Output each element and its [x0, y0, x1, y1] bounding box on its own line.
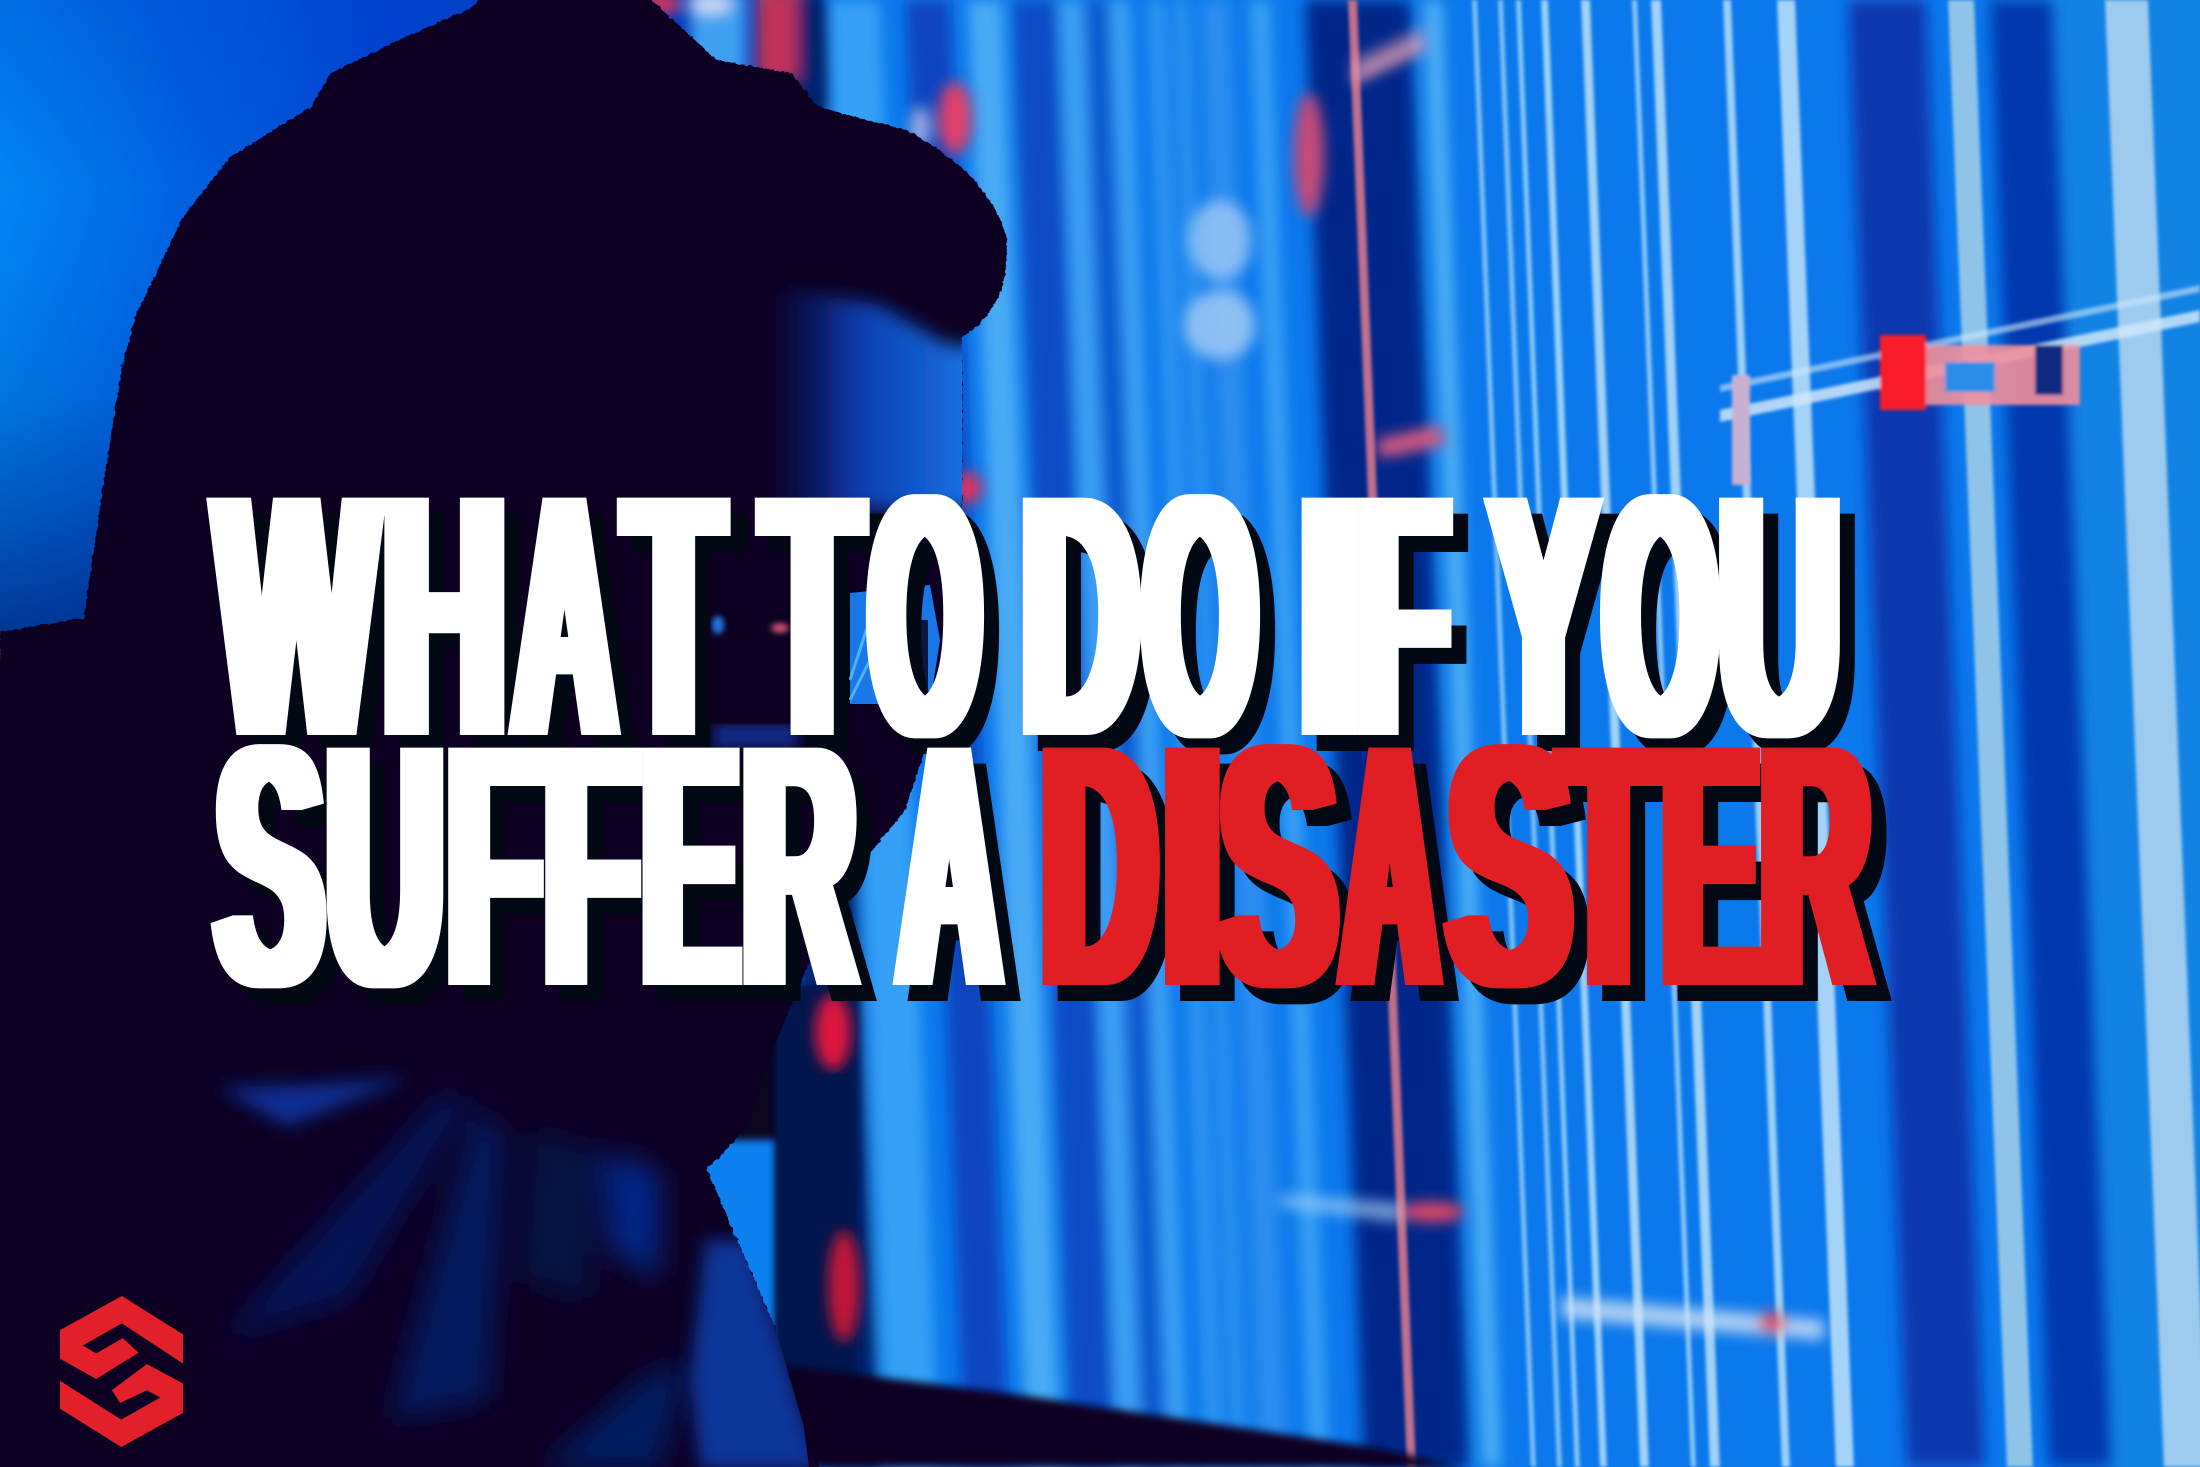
- shared filter for title extrusion: [0, 1466, 1, 1467]
- back wall: [0, 0, 860, 660]
- title line 2: S: [1219, 674, 1337, 1058]
- title: [206, 424, 1892, 1058]
- title line 1: U: [1719, 424, 1840, 809]
- title line 1: O: [1604, 424, 1717, 809]
- title line 1: A: [514, 424, 614, 809]
- red and pale screen details: [910, 28, 2200, 1340]
- title line 2: R: [743, 674, 855, 1058]
- title line 2: [210, 674, 1892, 1058]
- title line 1: D: [1022, 424, 1139, 809]
- title line 1: H: [383, 424, 506, 809]
- title line 1: O: [1144, 424, 1257, 809]
- title line 1: T: [625, 424, 722, 809]
- title line 2: F: [545, 674, 638, 1058]
- title line 2: A: [899, 674, 999, 1058]
- dark foreground wedge at bottom of screen: [700, 1360, 1465, 1467]
- title line 2: A: [1342, 674, 1437, 1058]
- icon: red hexagonal S logo: [60, 1296, 183, 1447]
- title line 2: I: [1159, 674, 1225, 1058]
- title line 2: S: [1447, 674, 1571, 1058]
- title line 2: U: [327, 674, 443, 1058]
- screen details above the hair: [638, 0, 824, 110]
- title line 2: R: [1761, 674, 1870, 1058]
- screen stripes: [760, 0, 2200, 1467]
- title line 2: D: [1042, 674, 1157, 1058]
- title line 1: Y: [1490, 424, 1597, 809]
- title line 1: T: [763, 424, 861, 809]
- title line 2: T: [1560, 674, 1657, 1058]
- title line 1: F: [1357, 424, 1448, 809]
- title line 1: I: [1295, 424, 1364, 809]
- dark band with red reflections behind the man: [700, 985, 860, 1385]
- title line 1: W: [216, 424, 377, 809]
- man: lit temple: [774, 284, 971, 514]
- title line 2: S: [216, 674, 323, 1058]
- title line 2: E: [1663, 674, 1759, 1058]
- title line 1: [206, 424, 1855, 809]
- title line 2: E: [643, 674, 738, 1058]
- man: head, beard and torso silhouette: [0, 0, 1007, 1467]
- man: glasses reflections: [712, 585, 940, 747]
- title line 2: F: [448, 674, 541, 1058]
- man: blue highlights on shirt folds: [218, 1077, 820, 1467]
- title line 1: O: [870, 424, 980, 809]
